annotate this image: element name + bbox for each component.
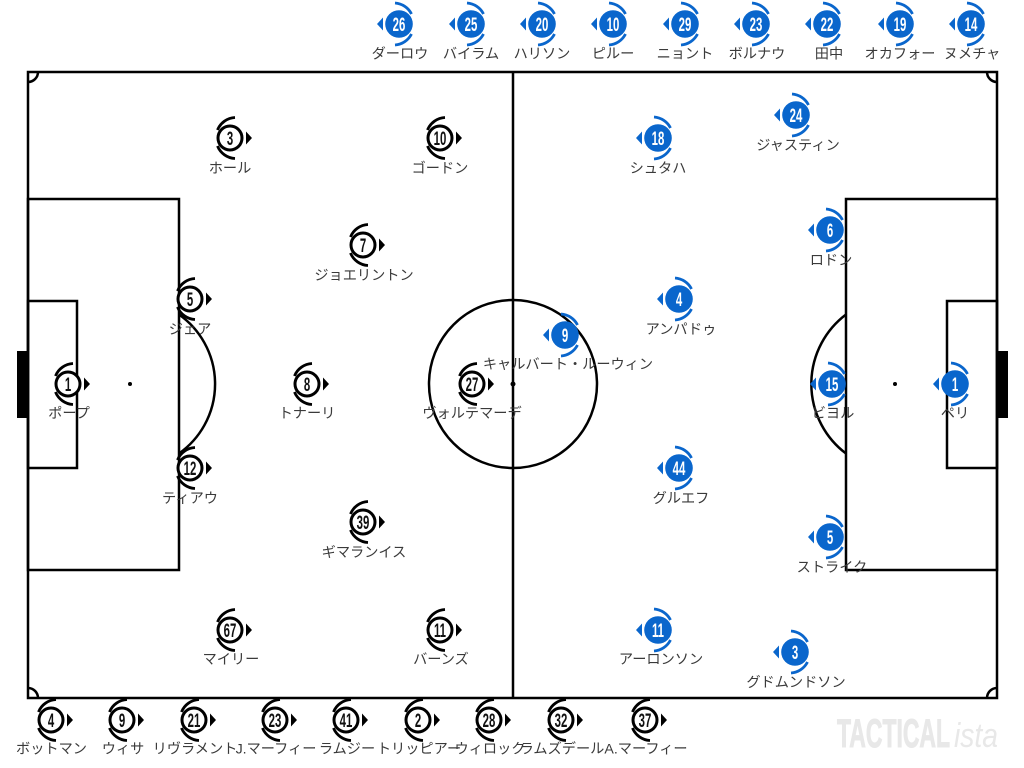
player: Tonali 8 [279,364,335,422]
player: Ampadu 4: アンパドゥ [646,322,716,338]
player: Hall 3: ホール [209,161,251,177]
sub: Ramsdale 32: ラムズデール [520,740,604,758]
sub: Wissa 9 [102,700,144,758]
corner arcs [28,72,997,698]
player: Bijol 15: 15 [826,375,839,396]
player: Tonali 8: トナーリ [279,406,335,422]
player: Tiaw 12: 12 [184,459,197,480]
sub: Bornauw 23: ボルナウ [729,46,785,62]
player: Gruev 44: グルエフ [653,491,709,507]
sub: Darlow 26: ダーロウ [372,46,428,62]
player: Aaronson 11: 11 [652,621,664,642]
sub: Okafor 19: オカフォー [865,46,935,62]
sub: Wissa 9: 9 [119,711,125,732]
player: Ampadu 4 [646,278,716,338]
player: Guimaraes 39: 39 [357,513,370,534]
sub: Nmecha 14 [944,3,1000,62]
player: Hall 3: 3 [227,129,233,150]
player: Hall 3 [209,118,252,177]
player: Rodon 6: 6 [827,221,833,242]
player: Stach 18: 18 [652,129,665,150]
sub: Nmecha 14: 14 [965,15,978,36]
player: Gudmundsson 3 [746,631,846,691]
halfway line [512,72,514,698]
sub: Willock 28 [455,700,525,758]
sub: Ramsey 41: ラムジー [319,742,375,758]
sub: Nyonto 29: ニョント [657,46,713,62]
pitch [28,72,997,698]
player: Barnes 11 [413,610,469,668]
right goal [997,351,1008,418]
player: Aaronson 11: アーロンソン [619,652,703,668]
sub: Ramsdale 32 [520,700,604,758]
player: Miley 67: 67 [224,621,237,642]
pitch spots [128,382,897,386]
player: Justin 24 [756,94,840,154]
player: Stach 18: シュタハ [630,161,686,177]
player: Bijol 15 [810,363,854,422]
player: Miley 67: マイリー [203,652,259,668]
sub: Trippier 2 [377,700,461,758]
sub: Livramento 21 [153,700,237,758]
player: Guimaraes 39: ギマランイス [322,545,406,561]
player: Woltemade 27: 27 [466,375,479,396]
left goal area [28,301,77,468]
sub: Byram 25 [443,3,499,62]
player: Perri 1 [933,363,969,422]
player: Pope 1 [48,364,90,422]
sub: Trippier 2: トリッピアー [377,742,461,758]
sub: Tanaka 22: 22 [821,15,834,36]
player: Calvert-Lewin 9: 9 [562,326,568,347]
touchlines and goal lines [28,72,997,698]
sub: Piroe 10 [591,3,634,62]
sub: J. Murphy 23: 23 [269,711,282,732]
player: Gudmundsson 3: グドムンドソン [746,675,846,691]
sub: Darlow 26 [372,3,428,62]
centre circle [429,300,597,468]
player: Barnes 11: バーンズ [413,652,469,668]
right penalty arc [811,314,846,454]
sub: Ramsey 41: 41 [340,711,353,732]
sub: A. Murphy 37: 37 [639,711,652,732]
sub: A. Murphy 37: A.マーフィー [604,742,688,758]
sub: Bornauw 23: 23 [750,15,763,36]
sub: Byram 25: 25 [465,15,478,36]
player: Bijol 15: ビヨル [812,406,854,422]
sub: A. Murphy 37 [604,700,688,758]
player: Calvert-Lewin 9 [483,314,653,373]
watermark: ista [954,717,998,755]
sub: Okafor 19: 19 [894,15,907,36]
sub: Willock 28: 28 [483,711,496,732]
sub: Nmecha 14: ヌメチャ [944,46,1000,62]
player: Rodon 6 [808,209,852,269]
player: Guimaraes 39 [322,502,406,561]
right penalty area [846,199,997,570]
left goal [17,351,28,418]
sub: J. Murphy 23 [236,700,316,758]
sub: Harrison 20 [514,3,570,62]
home starters [48,118,522,668]
sub: Nyonto 29 [657,3,713,62]
player: Justin 24: ジャスティン [756,138,840,154]
player: Tonali 8: 8 [304,375,310,396]
sub: J. Murphy 23: J.マーフィー [236,742,316,758]
sub: Harrison 20: 20 [536,15,549,36]
player: Woltemade 27 [422,364,522,422]
player: Stach 18 [630,117,686,177]
player: Barnes 11: 11 [434,621,446,642]
player: Joelinton 7 [314,224,414,284]
sub: Ramsey 41 [319,700,375,758]
sub: Okafor 19 [865,3,935,62]
player: Pope 1: 1 [65,375,71,396]
sub: Piroe 10: 10 [607,15,620,36]
player: Struijk 5: 5 [827,528,833,549]
sub: Byram 25: バイラム [443,46,499,62]
player: Woltemade 27: ヴォルテマーデ [422,405,522,422]
sub: Harrison 20: ハリソン [514,46,570,62]
player: Miley 67 [203,610,259,668]
player: Shear 5: ジェア [169,322,211,338]
player: Struijk 5 [797,516,867,576]
sub: Tanaka 22: 田中 [815,46,843,62]
player: Gordon 10 [412,118,468,177]
left penalty area [28,199,179,570]
player: Gruev 44: 44 [673,459,686,480]
sub: Nyonto 29: 29 [679,15,692,36]
player: Shear 5 [169,278,212,338]
away substitutes [372,3,1000,62]
player: Pope 1: ポープ [48,406,90,422]
sub: Wissa 9: ウィサ [102,742,144,758]
player: Joelinton 7: ジョエリントン [314,268,414,284]
sub: Livramento 21: リヴラメント [153,740,237,758]
sub: Botman 4: ボットマン [16,742,87,758]
player: Perri 1: 1 [952,375,958,396]
sub: Tanaka 22 [805,3,843,62]
sub: Ramsdale 32: 32 [555,711,568,732]
player: Tiaw 12 [162,448,218,507]
sub: Trippier 2: 2 [415,711,421,732]
player: Gordon 10: 10 [434,129,447,150]
player: Rodon 6: ロドン [810,253,852,269]
player: Tiaw 12: ティアウ [162,491,218,507]
sub: Botman 4: 4 [48,711,54,732]
player: Perri 1: ペリ [941,406,969,422]
away starters [483,94,969,691]
left penalty arc [179,314,215,454]
sub: Darlow 26: 26 [393,15,406,36]
sub: Bornauw 23 [729,3,785,62]
sub: Botman 4 [16,700,87,758]
player: Aaronson 11 [619,609,703,668]
sub: Livramento 21: 21 [188,711,201,732]
player: Gruev 44 [653,447,709,507]
right goal area [947,301,997,468]
player: Shear 5: 5 [187,290,193,311]
home substitutes [16,700,688,758]
sub: Piroe 10: ピルー [592,46,634,62]
player: Calvert-Lewin 9: キャルバート・ルーウィン [483,357,653,373]
player: Gudmundsson 3: 3 [792,643,798,664]
player: Ampadu 4: 4 [676,290,682,311]
player: Justin 24: 24 [790,106,803,127]
player: Joelinton 7: 7 [360,236,366,257]
player: Gordon 10: ゴードン [412,160,468,177]
player: Struijk 5: ストライク [797,560,867,576]
sub: Willock 28: ウィロック [455,742,525,758]
